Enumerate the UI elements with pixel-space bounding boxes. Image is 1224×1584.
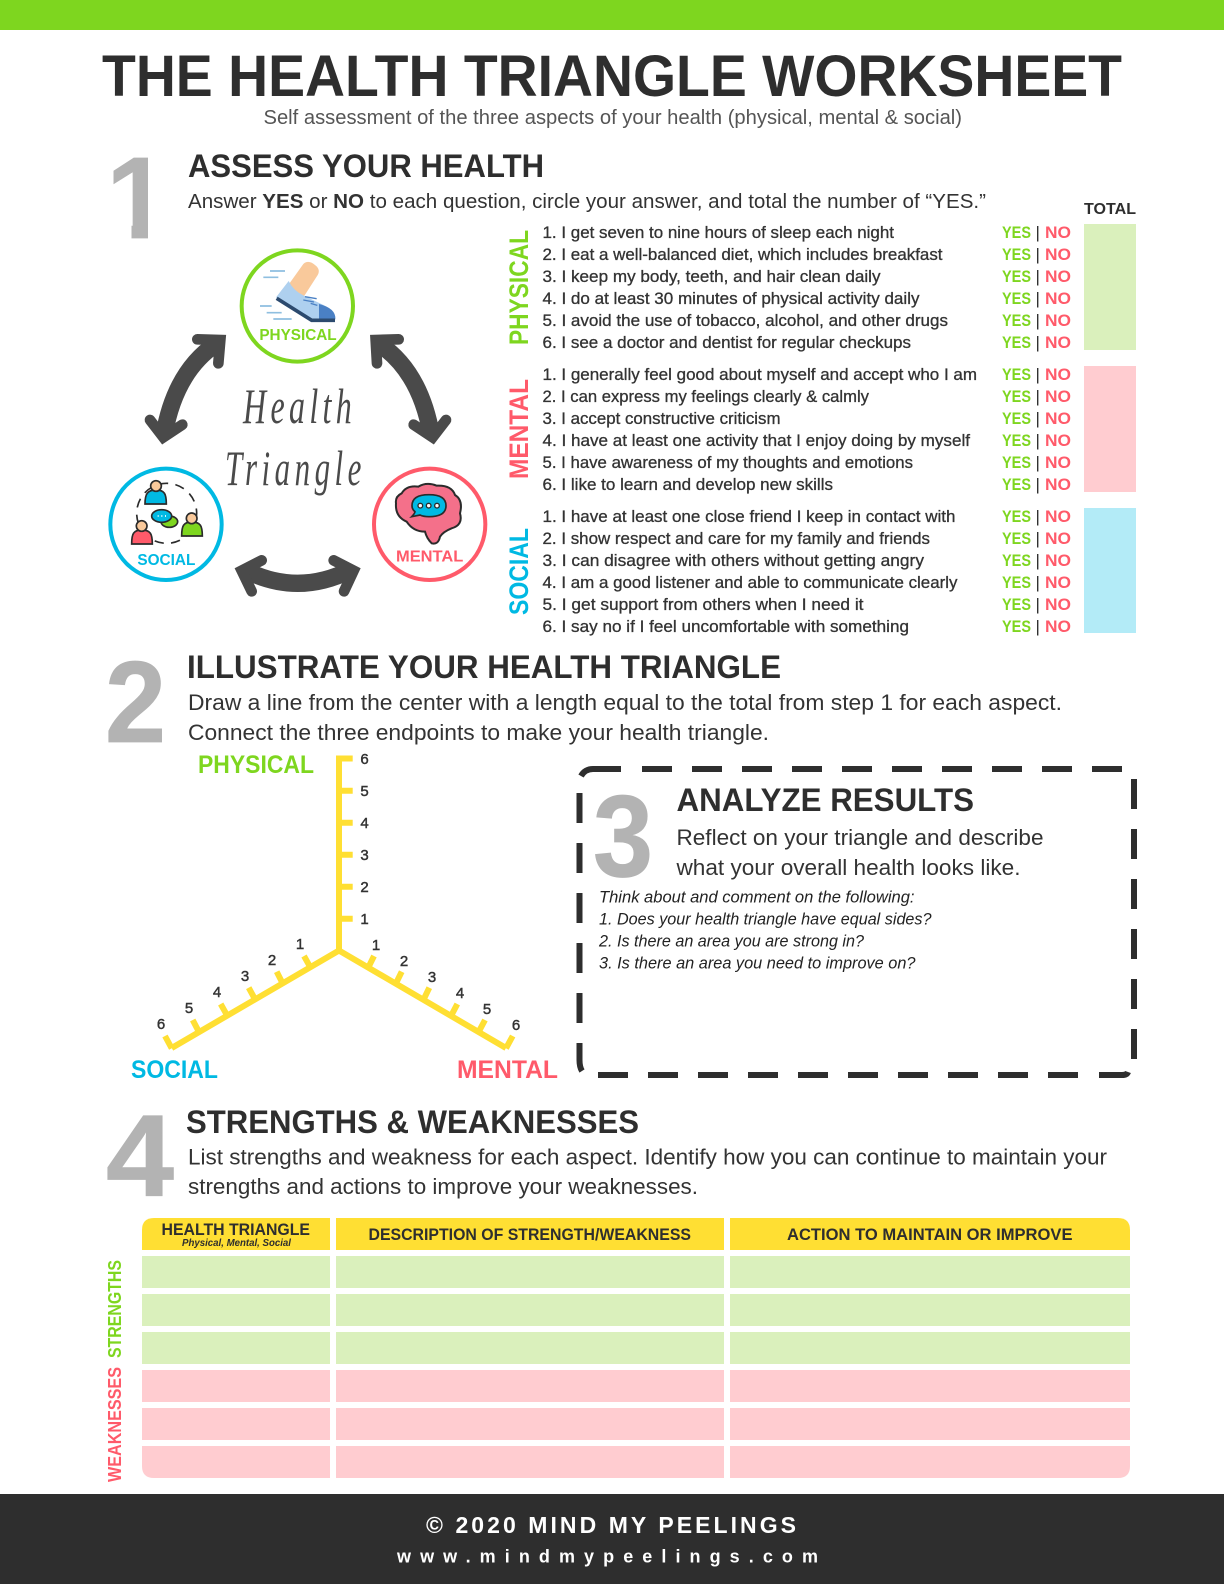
table header: DESCRIPTION OF STRENGTH/WEAKNESS [368,1226,691,1244]
heading: analyze results: ANALYZE RESULTS [676,782,974,818]
social question group: | [1036,529,1040,548]
mental question group: 5. I have awareness of my thoughts and emotions [542,454,913,472]
side label: mental: MENTAL [504,379,534,479]
mental question group: 1. I generally feel good about myself and accept who I am [542,366,977,384]
social question group: YES [1002,551,1031,570]
physical question group: NO [1045,311,1071,330]
panel: analyze results: 1. Does your health triangle have equal sides? [599,910,932,928]
instructions: List strengths and weakness for each aspect. Identify how you can continue to maintain your [188,1144,1107,1170]
axis lines and ticks [165,756,513,1048]
script title: health triangle: Triangle [225,441,361,496]
social question group: 4. I am a good listener and able to communicate clearly [542,574,958,592]
social question group: | [1036,573,1040,592]
weaknesses rows [142,1370,1130,1478]
physical scale numbers: 4 [360,815,369,832]
physical question group: 1. I get seven to nine hours of sleep each night [542,224,894,242]
mental scale numbers: 6 [512,1017,520,1034]
description: Reflect on your triangle and describe [676,825,1044,850]
label: social: SOCIAL [137,552,196,569]
physical question group: 4. I do at least 30 minutes of physical activity daily [542,290,920,308]
social question group: 1. I have at least one close friend I keep in contact with [542,508,956,526]
mental question group: YES [1002,365,1031,384]
arrow: physical to mental [376,339,446,437]
heading: strengths and weaknesses: STRENGTHS & WEAKNESSES [186,1104,639,1140]
physical question group: YES [1002,245,1031,264]
mental scale numbers [372,937,520,1034]
mental scale numbers: 5 [483,1001,491,1018]
mental question group: | [1036,365,1040,384]
panel: analyze results: what your overall health looks like. [675,855,1020,880]
script title: health triangle: Health [242,380,352,435]
physical question group [504,223,1071,352]
mental question group: YES [1002,409,1031,428]
mental question group: NO [1045,431,1071,450]
physical question group: NO [1045,223,1071,242]
social question group: YES [1002,617,1031,636]
label: physical axis: PHYSICAL [198,751,314,779]
mental scale numbers: 2 [400,953,408,970]
mental question group: 2. I can express my feelings clearly & calmly [542,388,870,406]
physical question group: YES [1002,289,1031,308]
mental scale numbers: 1 [372,937,380,954]
physical scale numbers: 3 [360,847,369,864]
social question group: YES [1002,573,1031,592]
social question group: | [1036,617,1040,636]
health triangle diagram [110,250,485,591]
physical question group: NO [1045,245,1071,264]
mental question group: | [1036,475,1040,494]
mental question group: 3. I accept constructive criticism [542,410,780,428]
physical question group: 5. I avoid the use of tobacco, alcohol, and other drugs [542,312,948,330]
mental question group: NO [1045,475,1071,494]
mental circle [374,469,485,580]
social question group: NO [1045,529,1071,548]
side label: weaknesses: WEAKNESSES [105,1367,125,1482]
icon: people talking [132,481,202,544]
mental question group: NO [1045,365,1071,384]
step number 2: 2 [105,637,166,767]
mental question group: | [1036,431,1040,450]
physical question group: NO [1045,267,1071,286]
heading: illustrate your health triangle: ILLUSTRATE YOUR HEALTH TRIANGLE [187,649,781,685]
social question group: YES [1002,507,1031,526]
physical scale numbers: 2 [360,879,369,896]
script title: health triangle [225,380,361,496]
social question group: | [1036,507,1040,526]
mental scale numbers: 3 [428,969,436,986]
mental question group: YES [1002,475,1031,494]
mental question group: YES [1002,431,1031,450]
footer [0,1494,1224,1584]
mental scale numbers: 4 [456,985,464,1002]
side label: social: SOCIAL [504,528,534,615]
step number 1: 1 [106,133,171,263]
total label: TOTAL [1084,201,1136,218]
social scale numbers [157,936,304,1033]
instructions: Draw a line from the center with a length equal to the total from step 1 for each aspect. [188,690,1062,715]
label: physical: PHYSICAL [259,327,337,344]
social question group: YES [1002,595,1031,614]
physical question group: | [1036,333,1040,352]
dashed border [580,769,1134,1075]
prompts: Think about and comment on the following: [599,888,914,906]
triangle axes chart [131,751,558,1084]
mental question group: | [1036,453,1040,472]
social scale numbers: 3 [241,968,249,985]
physical question group: NO [1045,289,1071,308]
mental question group: YES [1002,387,1031,406]
physical question group: YES [1002,267,1031,286]
side label: strengths: STRENGTHS [105,1260,125,1358]
social scale numbers: 1 [296,936,304,953]
section 1: assess your health [106,133,986,263]
physical question group: | [1036,223,1040,242]
social question group: 5. I get support from others when I need it [542,596,864,614]
mental question group: NO [1045,409,1071,428]
table header: ACTION TO MAINTAIN OR IMPROVE [787,1226,1072,1244]
social question group: NO [1045,507,1071,526]
panel: analyze results: 2. Is there an area you are strong in? [598,932,865,950]
panel: analyze results [580,769,1134,1075]
social question group: NO [1045,551,1071,570]
social scale numbers: 6 [157,1016,165,1033]
mental question group: | [1036,387,1040,406]
icon: running shoe [260,262,335,320]
label: social axis: SOCIAL [131,1056,218,1084]
mental question group: YES [1002,453,1031,472]
arrow: physical to social [150,339,220,437]
step number 4: 4 [106,1091,174,1221]
social scale numbers: 5 [185,1000,193,1017]
physical question group: 2. I eat a well-balanced diet, which includes breakfast [542,246,943,264]
website: www.mindmypeelings.com [396,1546,818,1566]
social question group: NO [1045,617,1071,636]
social question group: | [1036,551,1040,570]
social scale numbers: 2 [268,952,276,969]
section 2: illustrate: Connect the three endpoints to make your health triangle. [188,720,769,745]
physical question group: YES [1002,223,1031,242]
section 4: strengths and weaknesses: strengths and actions to improve your weaknesses. [188,1174,698,1199]
section 4: strengths and weaknesses [106,1091,1107,1221]
section 2: illustrate [105,637,1062,767]
physical question group: 6. I see a doctor and dentist for regular checkups [542,334,911,352]
table header: Physical, Mental, Social [182,1238,291,1249]
physical circle [242,250,353,362]
physical question group: YES [1002,311,1031,330]
social question group: NO [1045,573,1071,592]
physical question group: 3. I keep my body, teeth, and hair clean daily [542,268,881,286]
mental question group: NO [1045,453,1071,472]
total column [1084,201,1136,633]
social scale numbers: 4 [213,984,221,1001]
table header [142,1218,1130,1250]
physical question group: | [1036,245,1040,264]
social question group: YES [1002,529,1031,548]
social question group: 6. I say no if I feel uncomfortable with something [542,618,909,636]
physical scale numbers: 5 [360,783,369,800]
side label: physical: PHYSICAL [504,230,534,345]
strengths rows [142,1256,1130,1364]
subtitle: Self assessment of the three aspects of your health (physical, mental & social) [264,107,962,129]
physical question group: YES [1002,333,1031,352]
mental question group: 4. I have at least one activity that I enjoy doing by myself [542,432,970,450]
heading: assess your health: ASSESS YOUR HEALTH [188,148,544,184]
social question group [504,507,1071,636]
label: mental: MENTAL [396,549,464,566]
step number 3: 3 [593,771,653,901]
physical scale numbers [360,751,369,928]
mental question group: NO [1045,387,1071,406]
table header: HEALTH TRIANGLE [162,1221,310,1239]
social question group: 3. I can disagree with others without getting angry [542,552,925,570]
physical question group: | [1036,267,1040,286]
instructions: Answer YES or NO to each question, circle your answer, and total the number of “YES.” [188,191,986,213]
copyright: © 2020 MIND MY PEELINGS [426,1512,796,1538]
icon: brain with speech bubble [396,484,461,544]
physical question group: | [1036,311,1040,330]
social question group: 2. I show respect and care for my family and friends [542,530,930,548]
physical question group: NO [1045,333,1071,352]
strengths and weaknesses table [105,1218,1130,1482]
top green bar [0,0,1224,30]
mental question group: | [1036,409,1040,428]
title: THE HEALTH TRIANGLE WORKSHEET [102,44,1122,109]
social question group: | [1036,595,1040,614]
physical question group: | [1036,289,1040,308]
physical scale numbers: 1 [360,911,369,928]
arrow: social to mental [242,560,354,591]
mental question group: 6. I like to learn and develop new skills [542,476,833,494]
physical scale numbers: 6 [360,751,369,768]
social circle [110,469,222,580]
mental question group [504,365,1071,494]
panel: analyze results: 3. Is there an area you need to improve on? [599,954,916,972]
label: mental axis: MENTAL [457,1056,558,1084]
social question group: NO [1045,595,1071,614]
